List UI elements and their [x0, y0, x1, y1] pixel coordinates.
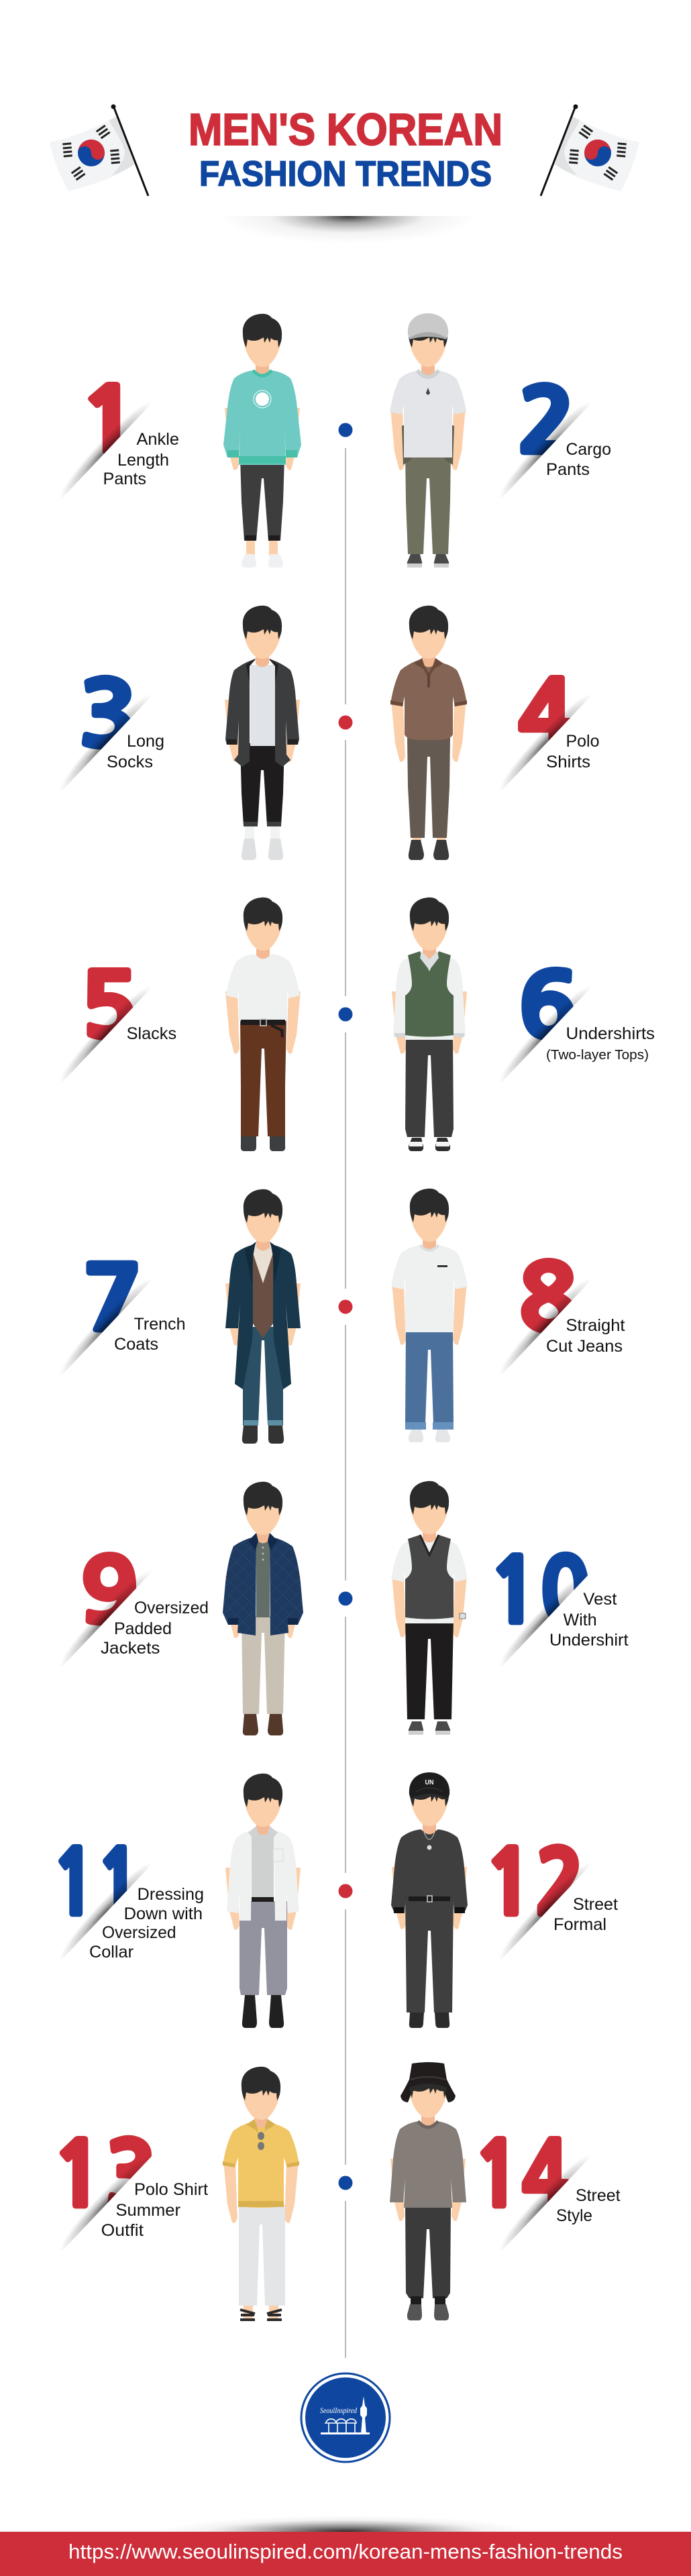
number 6 with label: Undershirts (Two-layer Tops): Undershirts [566, 1024, 655, 1043]
figure 13: yellow polo, white pants, sandals [223, 2067, 299, 2320]
figure 5: white tee, brown slacks [225, 898, 301, 1151]
number 13 with label: Polo Shirt Summer Outfit: Polo Shirt [134, 2180, 208, 2199]
number 1 with label: Ankle Length Pants: Length [117, 451, 169, 470]
title line two: FASHION TRENDS [199, 154, 492, 194]
number 13 with label: Polo Shirt Summer Outfit: Summer [115, 2201, 180, 2220]
icon: left Korean flag [50, 105, 148, 196]
number 7 with label: Trench Coats [53, 1255, 201, 1383]
number 1 with label: Ankle Length Pants: 1 [80, 377, 139, 466]
figure 7: dark teal trench coat [225, 1189, 301, 1444]
number 12 with label: Street Formal: 12 [484, 1839, 585, 1928]
number 9 with label: Oversized Padded Jackets: Padded [114, 1619, 172, 1638]
number 6 with label: Undershirts (Two-layer Tops) [492, 963, 655, 1091]
number 7 with label: Trench Coats: Coats [114, 1335, 158, 1354]
number 5 with label: Slacks [53, 963, 201, 1091]
number 2 with label: Cargo Pants [492, 378, 641, 506]
number 11 with label: Dressing Down with Oversized Collar: Down with [124, 1904, 203, 1923]
footer banner [0, 2532, 691, 2576]
icon: Seoul Inspired logo [301, 2373, 390, 2462]
number 10 with label: Vest With Undershirt: Vest [583, 1590, 617, 1609]
timeline [345, 448, 346, 2358]
figure 4: brown polo shirt [390, 606, 467, 860]
figure 3: dark jacket over white tee [225, 606, 300, 860]
number 8 with label: Straight Cut Jeans: Straight [566, 1316, 625, 1335]
number 5 with label: Slacks: 5 [80, 963, 138, 1051]
number 4 with label: Polo Shirts: 4 [518, 670, 574, 759]
icon: right Korean flag [541, 105, 639, 196]
number 14 with label: Street Style: Style [556, 2206, 592, 2225]
number 10 with label: Vest With Undershirt: 10 [489, 1548, 590, 1636]
footer shadow [161, 2516, 530, 2532]
number 11 with label: Dressing Down with Oversized Collar [52, 1839, 204, 1968]
number 4 with label: Polo Shirts [492, 670, 641, 799]
number 4 with label: Polo Shirts: Shirts [546, 753, 590, 771]
figure 14: grey sweater, cargo joggers, bucket hat [390, 2062, 466, 2320]
number 9 with label: Oversized Padded Jackets [53, 1548, 209, 1675]
number 6 with label: Undershirts (Two-layer Tops): 6 [518, 963, 577, 1051]
number 11 with label: Dressing Down with Oversized Collar: Dressing [138, 1885, 204, 1904]
figure 9: navy quilted padded jacket [223, 1482, 303, 1735]
number 4 with label: Polo Shirts: Polo [566, 732, 600, 751]
figure 2: cap, grey tee, cargo pants [390, 313, 466, 568]
number 3 with label: Long Socks [53, 671, 201, 799]
number 1 with label: Ankle Length Pants: Pants [103, 470, 146, 488]
figure 8: white tee, straight cut jeans [391, 1189, 468, 1442]
number 13 with label: Polo Shirt Summer Outfit [52, 2131, 208, 2259]
number 3 with label: Long Socks: Socks [107, 753, 153, 771]
number 11 with label: Dressing Down with Oversized Collar: 11 [52, 1839, 141, 1928]
figure 6: green vest over white shirt [392, 898, 467, 1151]
figure 10: grey vest with undershirt [391, 1481, 468, 1735]
number 11 with label: Dressing Down with Oversized Collar: Collar [89, 1943, 134, 1962]
number 8 with label: Straight Cut Jeans: Cut Jeans [546, 1337, 623, 1356]
number 8 with label: Straight Cut Jeans: 8 [519, 1254, 577, 1343]
number 3 with label: Long Socks: 3 [78, 671, 138, 759]
number 12 with label: Street Formal: Street [573, 1895, 618, 1914]
number 12 with label: Street Formal [484, 1839, 641, 1968]
number 2 with label: Cargo Pants: Pants [546, 460, 590, 479]
number 9 with label: Oversized Padded Jackets: 9 [80, 1548, 139, 1636]
number 9 with label: Oversized Padded Jackets: Jackets [101, 1639, 160, 1658]
number 11 with label: Dressing Down with Oversized Collar: Oversized [102, 1923, 176, 1942]
number 2 with label: Cargo Pants: Cargo [566, 440, 611, 459]
number 9 with label: Oversized Padded Jackets: Oversized [134, 1599, 209, 1617]
timeline dots [338, 423, 353, 2190]
number 6 with label: Undershirts (Two-layer Tops): (Two-layer Tops) [546, 1048, 649, 1063]
figure 11: open white shirt, grey pants [225, 1774, 301, 2028]
number 5 with label: Slacks: Slacks [127, 1024, 176, 1043]
title [189, 105, 502, 194]
number 7 with label: Trench Coats: Trench [134, 1315, 185, 1334]
number 13 with label: Polo Shirt Summer Outfit: 13 [52, 2131, 157, 2220]
number 2 with label: Cargo Pants: 2 [517, 378, 576, 466]
number 10 with label: Vest With Undershirt: Undershirt [549, 1631, 629, 1650]
number 1 with label: Ankle Length Pants: Ankle [137, 430, 179, 449]
number 1 with label: Ankle Length Pants [53, 377, 201, 506]
number 14 with label: Street Style: 14 [474, 2131, 570, 2220]
figure 12: street formal black outfit with cap: UN [425, 1779, 433, 1786]
footer URL: https://www.seoulinspired.com/korean-mens-fashion-trends [68, 2540, 623, 2563]
number 3 with label: Long Socks: Long [127, 732, 164, 751]
figure 12: street formal black outfit with cap [391, 1772, 468, 2028]
icon: Seoul Inspired logo: SeoulInspired [320, 2406, 358, 2415]
number 10 with label: Vest With Undershirt [489, 1548, 641, 1675]
number 10 with label: Vest With Undershirt: With [564, 1611, 597, 1629]
title line one: MEN'S KOREAN [189, 105, 502, 155]
number 13 with label: Polo Shirt Summer Outfit: Outfit [101, 2221, 144, 2240]
number 14 with label: Street Style: Street [576, 2186, 621, 2205]
number 8 with label: Straight Cut Jeans [492, 1254, 641, 1383]
number 7 with label: Trench Coats: 7 [83, 1255, 143, 1344]
title shadow [217, 216, 479, 244]
number 14 with label: Street Style [474, 2131, 641, 2259]
number 12 with label: Street Formal: Formal [553, 1915, 606, 1934]
figure 1: teal sweatshirt [223, 314, 301, 568]
